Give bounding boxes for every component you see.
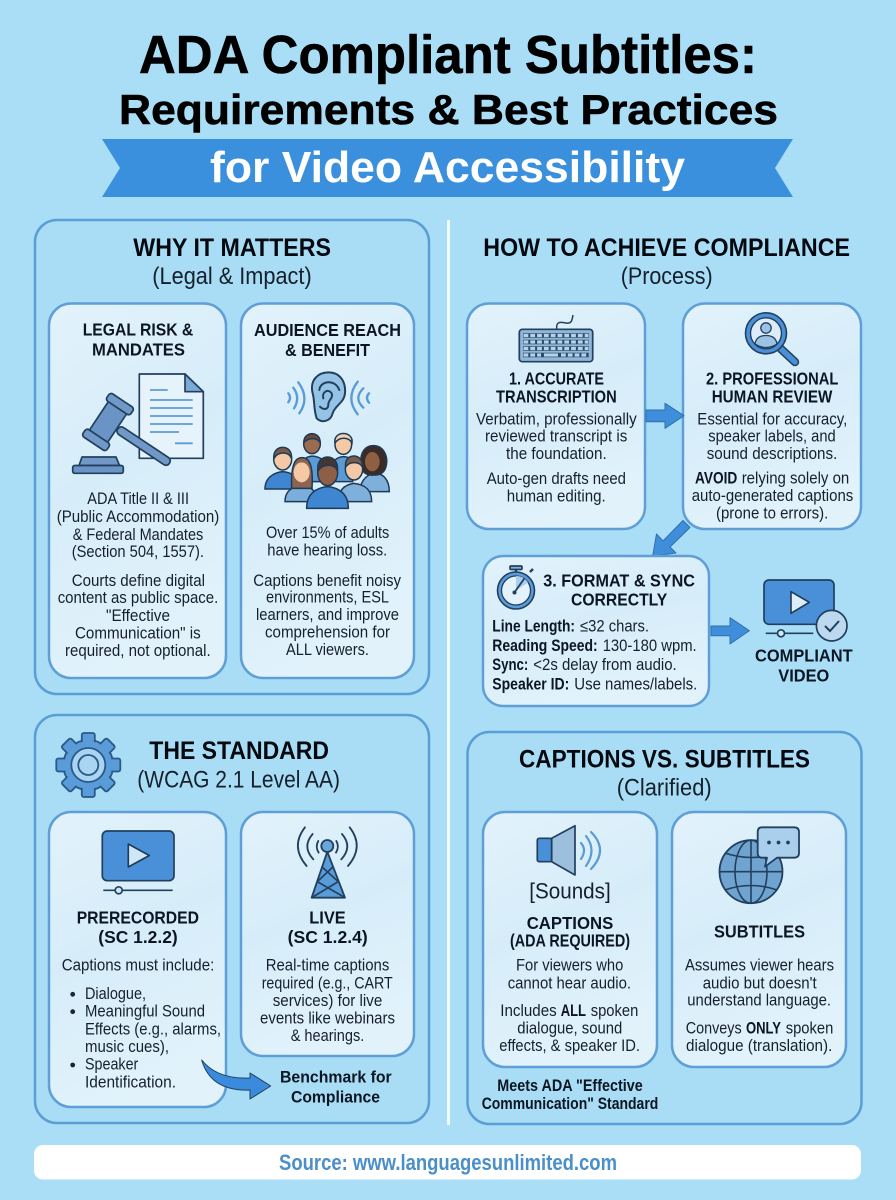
callout: benchmark for compliance [280, 1068, 392, 1106]
audience body text: ALL viewers. [286, 641, 369, 659]
callout: benchmark for compliance: Benchmark for [280, 1068, 392, 1087]
live body text: Real-time captions [266, 957, 389, 975]
arrow: to benchmark [202, 1060, 271, 1099]
heading: captions vs subtitles: CAPTIONS VS. SUBTITLES [519, 747, 810, 774]
step 1 body text: Verbatim, professionally [476, 410, 638, 428]
ribbon subtitle: for Video Accessibility [210, 143, 686, 192]
icon: keyboard [519, 315, 593, 362]
captions body text: ALL [561, 1002, 586, 1020]
card: captions: [Sounds] [529, 878, 611, 903]
live body text: & hearings. [291, 1027, 364, 1045]
icon: magnifier with person [746, 313, 795, 362]
legal body text: Courts define digital [72, 572, 205, 590]
subtitles body text: understand language. [687, 992, 831, 1010]
compliant video outcome [755, 580, 853, 686]
captions body text: effects, & speaker ID. [499, 1037, 640, 1055]
card: captions: (ADA REQUIRED) [510, 931, 630, 951]
captions body text: spoken [591, 1002, 638, 1020]
heading: why it matters: (Legal & Impact) [152, 263, 312, 290]
title: Requirements & Best Practices [119, 86, 778, 133]
audience body text: have hearing loss. [267, 542, 387, 560]
step 1 body text: reviewed transcript is [485, 428, 627, 446]
step 3 specification list: Reading Speed: [492, 637, 598, 655]
step 3 specification list: 130-180 wpm. [603, 637, 697, 655]
captions body text: For viewers who [516, 957, 623, 975]
card: prerecorded: (SC 1.2.2) [98, 927, 178, 947]
audience body text: Captions benefit noisy [253, 572, 402, 590]
card: legal risk and mandates: LEGAL RISK & [83, 320, 194, 340]
subtitles body text: dialogue (translation). [686, 1037, 832, 1055]
step 2 body text: Essential for accuracy, [697, 410, 847, 428]
step 2 body text: AVOID [695, 469, 738, 487]
step 2 body text: sound descriptions. [707, 445, 837, 463]
panel: the standard [35, 715, 429, 1123]
step 1 body text: Auto-gen drafts need [487, 470, 626, 488]
captions body text: Includes [500, 1002, 557, 1020]
card: live: (SC 1.2.4) [288, 927, 368, 947]
icon: gear [56, 733, 120, 797]
subtitles body text: spoken [786, 1019, 833, 1037]
card: step 3 format and sync: CORRECTLY [571, 590, 668, 610]
card: prerecorded: PRERECORDED [77, 908, 199, 928]
ribbon subtitle [102, 139, 793, 197]
audience body text: environments, ESL [266, 589, 389, 607]
prerecorded body list: Speaker [85, 1055, 139, 1073]
prerecorded body list: Meaningful Sound [85, 1003, 205, 1021]
icon: speaker with sound waves [537, 826, 600, 875]
heading: captions vs subtitles: (Clarified) [617, 775, 712, 802]
icon: gavel and document [73, 374, 203, 485]
heading: the standard [137, 738, 340, 793]
card: legal risk and mandates: MANDATES [92, 340, 185, 360]
heading: the standard: (WCAG 2.1 Level AA) [137, 766, 340, 793]
step 3 specification list: <2s delay from audio. [533, 656, 677, 674]
heading: captions vs subtitles [519, 747, 810, 802]
card: subtitles: SUBTITLES [714, 921, 805, 941]
legal body text: content as public space. [58, 589, 218, 607]
card: step 3 format and sync: 3. FORMAT & SYNC [543, 571, 695, 591]
legal body text: (Section 504, 1557). [72, 543, 204, 561]
step 3 specification list: Speaker ID: [492, 675, 569, 693]
card: step 2 professional human review [683, 304, 861, 529]
card: audience reach and benefit [241, 304, 414, 678]
callout: benchmark for compliance: Compliance [291, 1087, 380, 1106]
legal body text: & Federal Mandates [73, 526, 203, 544]
prerecorded body list: Effects (e.g., alarms, [85, 1020, 221, 1038]
step 2 body text: (prone to errors). [716, 504, 828, 522]
step 3 specification list: ≤32 chars. [580, 618, 649, 636]
card: step 2 professional human review: 2. PROFESSIONAL [706, 368, 839, 388]
card: audience reach and benefit: & BENEFIT [285, 340, 370, 360]
panel: captions vs subtitles [468, 732, 862, 1124]
icon: broadcast tower [298, 827, 357, 898]
icon: video player [102, 831, 174, 894]
audience body text: comprehension for [265, 623, 391, 641]
captions body text: dialogue, sound [517, 1019, 622, 1037]
live body text: services) for live [273, 992, 382, 1010]
heading: the standard: THE STANDARD [149, 738, 329, 765]
prerecorded body list: Dialogue, [85, 985, 146, 1003]
subtitles body text: audio but doesn't [703, 974, 817, 992]
compliant video outcome: COMPLIANT [755, 646, 853, 666]
card: live [241, 812, 414, 1056]
live body text: events like webinars [260, 1009, 395, 1027]
card: captions: CAPTIONS [527, 913, 613, 933]
compliant video outcome: VIDEO [778, 666, 829, 686]
legal body text: "Effective [106, 607, 170, 625]
card: step 2 professional human review: HUMAN REVIEW [712, 386, 833, 406]
card: step 1 accurate transcription: TRANSCRIPTION [496, 386, 617, 406]
callout: meets ADA standard: Communication" Standard [482, 1095, 658, 1113]
subtitles body text: Conveys [686, 1019, 742, 1037]
legal body text: (Public Accommodation) [57, 508, 219, 526]
step 3 specification list [492, 618, 697, 693]
panel: why it matters [35, 220, 429, 694]
card: legal risk and mandates [49, 304, 226, 678]
prerecorded body list: music cues), [85, 1038, 169, 1056]
prerecorded body list [62, 957, 221, 1091]
live body text [260, 957, 395, 1045]
step 3 specification list: Sync: [492, 656, 528, 674]
card: audience reach and benefit: AUDIENCE REACH [254, 320, 401, 340]
heading: how to achieve compliance: (Process) [621, 263, 713, 290]
arrow: step 1 to step 2 [646, 403, 684, 428]
audience body text [253, 524, 402, 659]
step 3 specification list: Use names/labels. [574, 675, 697, 693]
legal body text: required, not optional. [65, 642, 211, 660]
step 3 specification list: Line Length: [492, 618, 575, 636]
legal body text: Communication" is [75, 625, 201, 643]
step 2 body text: relying solely on [742, 469, 849, 487]
step 2 body text [692, 410, 853, 522]
icon: diverse audience [265, 433, 389, 508]
heading: why it matters [133, 235, 331, 290]
card: step 1 accurate transcription [467, 304, 645, 529]
card: prerecorded [49, 812, 226, 1107]
arrow: step 3 to compliant video [711, 618, 749, 644]
icon: stopwatch [498, 566, 534, 609]
audience body text: Over 15% of adults [266, 524, 389, 542]
heading: how to achieve compliance: HOW TO ACHIEVE COMPLIANCE [483, 235, 850, 262]
title [119, 26, 778, 133]
title: ADA Compliant Subtitles: [139, 26, 757, 85]
callout: meets ADA standard: Meets ADA "Effective [497, 1077, 643, 1095]
step 2 body text: auto-generated captions [692, 487, 853, 505]
card: step 3 format and sync [483, 556, 709, 706]
arrow: step 2 to step 3 [653, 520, 690, 556]
icon: video with check [764, 580, 847, 641]
step 1 body text: the foundation. [506, 445, 607, 463]
center divider [447, 220, 450, 1125]
source bar: Source: www.languagesunlimited.com [279, 1150, 617, 1175]
heading: how to achieve compliance [483, 235, 850, 290]
audience body text: learners, and improve [256, 606, 399, 624]
card: step 1 accurate transcription: 1. ACCURATE [509, 368, 604, 388]
icon: ear with sound waves [288, 372, 369, 421]
step 1 body text [476, 410, 638, 506]
callout: meets ADA standard [482, 1077, 658, 1113]
prerecorded body list: Captions must include: [62, 957, 214, 975]
captions body text: cannot hear audio. [508, 974, 631, 992]
legal body text: ADA Title II & III [87, 490, 189, 508]
heading: why it matters: WHY IT MATTERS [133, 235, 331, 262]
source bar [34, 1145, 861, 1180]
subtitles body text: ONLY [746, 1019, 781, 1037]
captions body text [499, 957, 640, 1055]
prerecorded body list: Identification. [85, 1073, 176, 1091]
legal body text [57, 490, 219, 660]
card: subtitles [672, 812, 846, 1067]
icon: globe with speech bubble [720, 827, 799, 903]
step 1 body text: human editing. [507, 488, 606, 506]
subtitles body text: Assumes viewer hears [685, 957, 834, 975]
subtitles body text [685, 957, 834, 1055]
card: live: LIVE [309, 908, 346, 928]
live body text: required (e.g., CART [262, 974, 393, 992]
step 2 body text: speaker labels, and [708, 428, 836, 446]
card: captions [483, 812, 657, 1067]
